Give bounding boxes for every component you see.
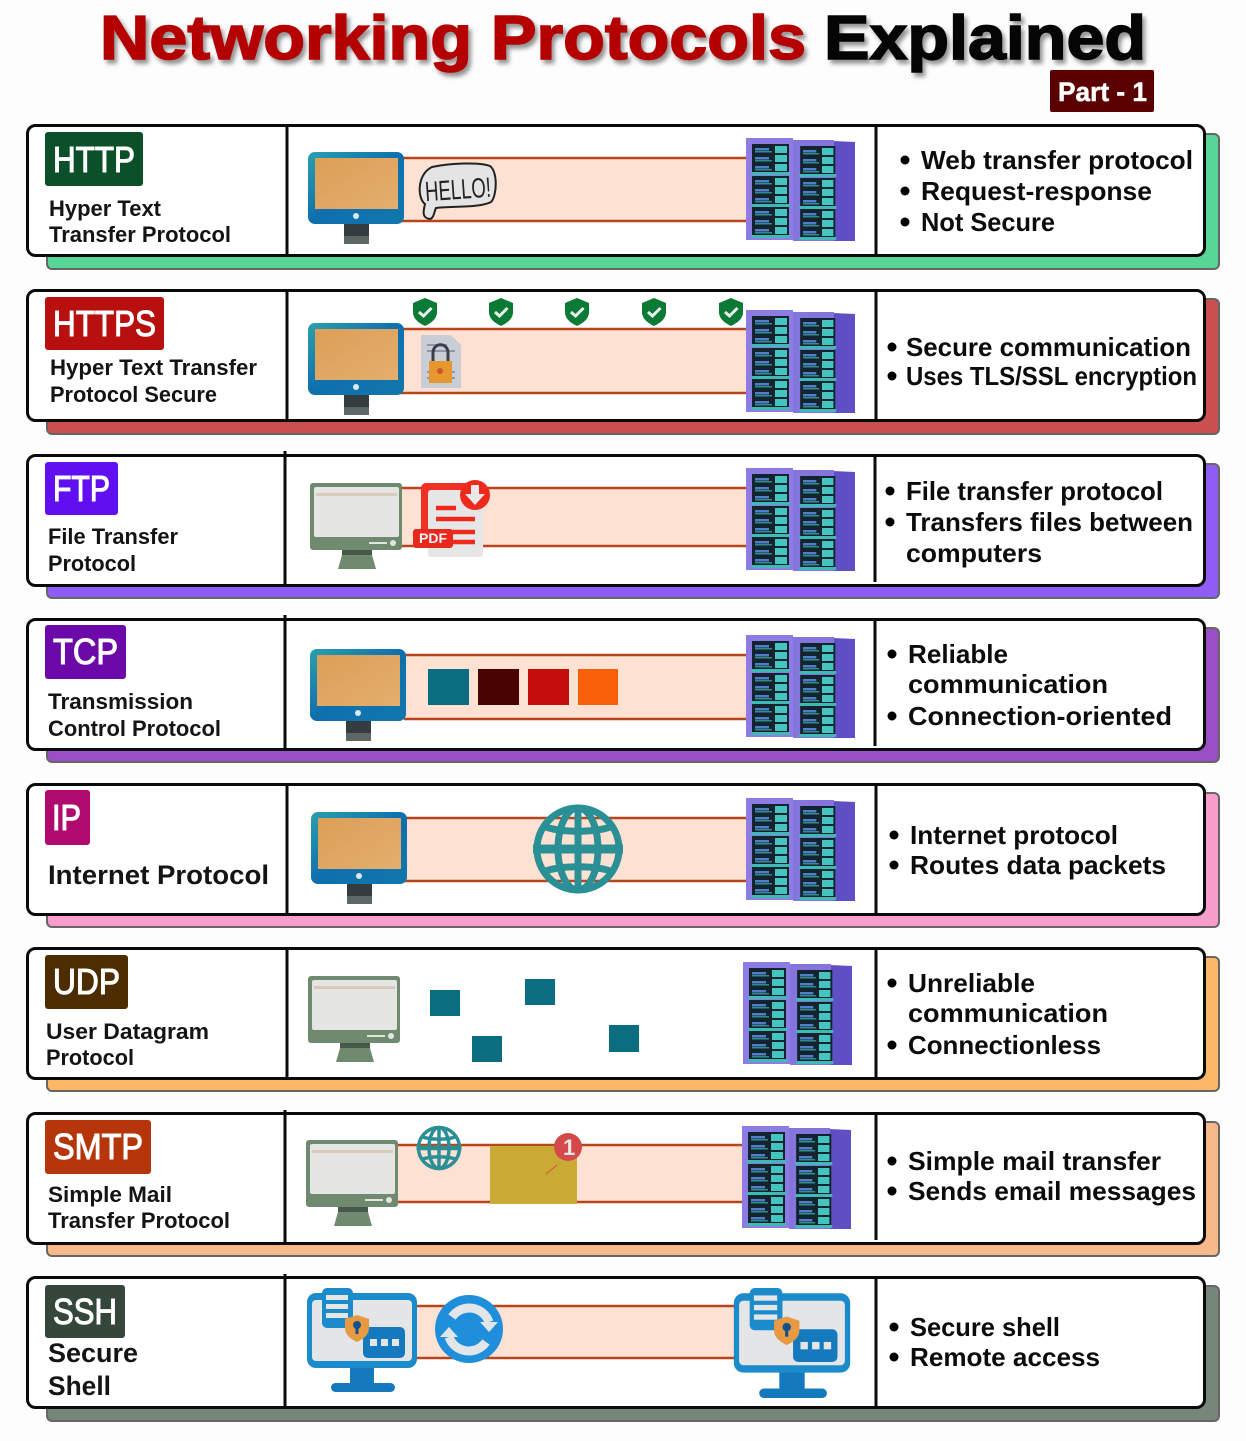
HTTP connection pipe <box>400 158 748 221</box>
locked document <box>421 335 461 388</box>
UDP bullet list: communication <box>908 998 1108 1028</box>
badge: FTP: FTP <box>53 468 110 509</box>
client monitor <box>310 649 406 741</box>
badge: IP <box>45 790 90 845</box>
HTTP bullet list <box>900 145 1193 237</box>
SSH bullet list <box>890 1312 1100 1372</box>
FTP full name <box>48 524 178 576</box>
SSH full name <box>48 1338 138 1401</box>
IP connection pipe <box>405 818 748 881</box>
title: Explained <box>824 4 1146 73</box>
FTP full name: Protocol <box>48 551 136 576</box>
server <box>746 138 855 241</box>
hello speech bubble <box>420 163 496 219</box>
client monitor <box>311 812 407 904</box>
part label <box>1050 70 1154 112</box>
panel: SMTP <box>28 1110 1219 1256</box>
panel: SSH <box>28 1274 1219 1421</box>
SMTP full name: Transfer Protocol <box>48 1208 230 1233</box>
server <box>742 1126 851 1229</box>
TCP full name: Control Protocol <box>48 716 221 741</box>
FTP full name: File Transfer <box>48 524 178 549</box>
client monitor <box>308 323 404 415</box>
badge: HTTP: HTTP <box>53 139 135 180</box>
HTTPS full name <box>50 355 257 407</box>
badge: TCP <box>45 625 126 679</box>
HTTPS bullet list <box>888 332 1197 391</box>
IP bullet list <box>890 820 1166 880</box>
HTTP full name: Transfer Protocol <box>49 222 231 247</box>
SMTP full name <box>48 1182 230 1233</box>
PDF file icon: PDF <box>419 530 447 546</box>
HTTPS connection pipe <box>400 329 748 393</box>
TCP full name <box>48 689 221 741</box>
IP full name: Internet Protocol <box>48 860 269 890</box>
part label: Part - 1 <box>1058 77 1147 107</box>
badge: SSH: SSH <box>53 1291 117 1332</box>
SMTP bullet list <box>888 1146 1196 1206</box>
envelope with notification <box>490 1133 582 1204</box>
SSH full name: Secure <box>48 1338 138 1368</box>
panel: HTTP <box>28 125 1219 269</box>
SSH bullet list: Secure shell <box>910 1312 1060 1342</box>
TCP bullet list: communication <box>908 669 1108 699</box>
UDP full name <box>46 1019 209 1070</box>
SMTP full name: Simple Mail <box>48 1182 172 1207</box>
UDP bullet list <box>888 968 1108 1060</box>
SSH full name: Shell <box>48 1371 111 1401</box>
small globe <box>416 1126 462 1170</box>
IP bullet list: Internet protocol <box>910 820 1118 850</box>
TCP full name: Transmission <box>48 689 193 714</box>
ordered packets <box>428 669 618 705</box>
HTTPS full name: Protocol Secure <box>50 382 217 407</box>
UDP bullet list: Connectionless <box>908 1030 1101 1060</box>
FTP bullet list: computers <box>906 538 1042 568</box>
UDP bullet list: Unreliable <box>908 968 1035 998</box>
secure server terminal <box>734 1288 850 1398</box>
SMTP bullet list: Simple mail transfer <box>908 1146 1161 1176</box>
HTTPS bullet list: Uses TLS/SSL encryption <box>906 361 1197 391</box>
FTP connection pipe <box>400 488 748 546</box>
sync icon <box>435 1295 503 1363</box>
server <box>746 310 855 413</box>
UDP full name: Protocol <box>46 1045 134 1070</box>
title: Networking Protocols <box>100 4 806 73</box>
server <box>746 468 855 571</box>
panel: FTP <box>28 451 1219 598</box>
HTTP bullet list: Web transfer protocol <box>921 145 1193 175</box>
badge: HTTP <box>45 132 143 186</box>
server <box>746 635 855 738</box>
title <box>100 4 1146 73</box>
secure client terminal <box>307 1288 417 1392</box>
server <box>746 798 855 901</box>
TCP bullet list <box>888 639 1172 731</box>
HTTPS full name: Hyper Text Transfer <box>50 355 257 380</box>
HTTP full name <box>49 196 231 247</box>
panel: UDP <box>28 948 1219 1091</box>
badge: FTP <box>45 462 118 515</box>
panel: HTTPS <box>28 290 1219 434</box>
badge: SSH <box>45 1285 125 1338</box>
HTTP bullet list: Request-response <box>921 176 1152 206</box>
HTTPS bullet list: Secure communication <box>906 332 1191 362</box>
client monitor <box>306 1140 398 1226</box>
server <box>743 962 852 1065</box>
SMTP connection pipe <box>397 1145 745 1202</box>
scattered packets <box>430 979 639 1062</box>
HTTP bullet list: Not Secure <box>921 207 1055 237</box>
SMTP bullet list: Sends email messages <box>908 1176 1196 1206</box>
FTP bullet list <box>886 476 1193 568</box>
HTTP full name: Hyper Text <box>49 196 162 221</box>
TCP connection pipe <box>404 655 748 719</box>
FTP bullet list: File transfer protocol <box>906 476 1163 506</box>
badge: IP: IP <box>52 797 81 838</box>
badge: HTTPS: HTTPS <box>53 303 156 344</box>
globe <box>533 806 623 892</box>
security shields <box>413 298 743 326</box>
SSH bullet list: Remote access <box>910 1342 1100 1372</box>
TCP bullet list: Reliable <box>908 639 1008 669</box>
PDF file icon <box>413 480 490 557</box>
badge: UDP <box>45 955 128 1009</box>
client monitor <box>308 976 400 1062</box>
badge: HTTPS <box>45 297 164 350</box>
SSH connection pipe <box>415 1306 735 1358</box>
UDP full name: User Datagram <box>46 1019 209 1044</box>
FTP bullet list: Transfers files between <box>906 507 1193 537</box>
badge: UDP: UDP <box>53 961 120 1002</box>
panel: TCP <box>28 615 1219 762</box>
badge: TCP: TCP <box>53 631 118 672</box>
TCP bullet list: Connection-oriented <box>908 701 1172 731</box>
client monitor <box>310 483 402 569</box>
badge: SMTP <box>45 1120 151 1174</box>
envelope with notification: 1 <box>563 1135 575 1160</box>
panel: IP <box>28 784 1219 927</box>
client monitor <box>308 152 404 244</box>
badge: SMTP: SMTP <box>53 1126 143 1167</box>
IP bullet list: Routes data packets <box>910 850 1166 880</box>
hello speech bubble: HELLO! <box>424 172 492 207</box>
